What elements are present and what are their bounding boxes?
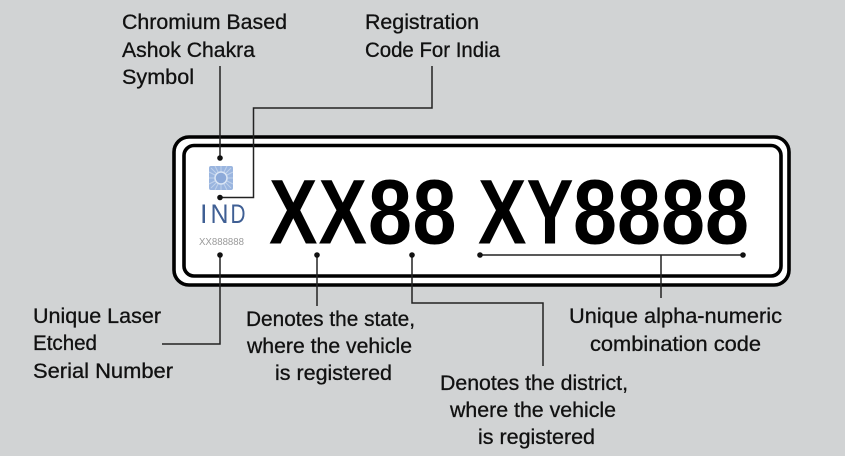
plate text: state and district: 8	[412, 162, 456, 264]
callout: chromium symbol: Symbol	[122, 66, 194, 89]
callout: state: is registered	[275, 362, 392, 385]
callout: registration code: Registration	[365, 11, 479, 34]
plate text: state and district	[269, 162, 456, 264]
serial number on plate: XX888888	[199, 237, 244, 248]
callout: district	[409, 252, 628, 449]
callout: alpha-numeric code	[477, 252, 782, 356]
callout: chromium symbol: Ashok Chakra	[122, 39, 255, 62]
plate text: alpha-numeric code: Y	[526, 162, 574, 264]
plate text: alpha-numeric code	[478, 162, 749, 264]
plate text: state and district: X	[269, 162, 318, 264]
plate text: alpha-numeric code: 8	[661, 162, 705, 264]
plate text: alpha-numeric code: 8	[705, 162, 749, 264]
callout: chromium symbol	[122, 11, 287, 161]
plate text: state and district: X	[318, 162, 367, 264]
IND registration code: I	[200, 199, 208, 229]
icon: Ashok Chakra hologram	[209, 166, 233, 190]
callout: alpha-numeric code: combination code	[590, 333, 761, 356]
callout: registration code	[217, 11, 500, 200]
plate text: state and district: 8	[368, 162, 412, 264]
IND registration code	[200, 199, 246, 229]
callout: state: where the vehicle	[246, 335, 412, 358]
callout: laser serial number: Etched	[33, 332, 97, 355]
licence plate	[174, 137, 789, 285]
IND registration code: N	[210, 199, 228, 229]
callout: alpha-numeric code: Unique alpha-numeric	[569, 305, 782, 328]
callout: state: Denotes the state,	[246, 308, 415, 331]
callout: chromium symbol: Chromium Based	[122, 11, 287, 34]
callout: laser serial number: Serial Number	[33, 360, 173, 383]
callout: district: where the vehicle	[449, 399, 616, 422]
callout: laser serial number: Unique Laser	[33, 305, 161, 328]
callout: state	[246, 252, 415, 385]
plate text: alpha-numeric code: X	[478, 162, 526, 264]
callout: registration code: Code For India	[365, 39, 500, 62]
plate text: alpha-numeric code: 8	[573, 162, 617, 264]
callout: laser serial number	[33, 252, 223, 383]
IND registration code: D	[230, 199, 246, 229]
callout: district: is registered	[478, 426, 595, 449]
plate text: alpha-numeric code: 8	[617, 162, 661, 264]
callout: district: Denotes the district,	[440, 372, 628, 395]
